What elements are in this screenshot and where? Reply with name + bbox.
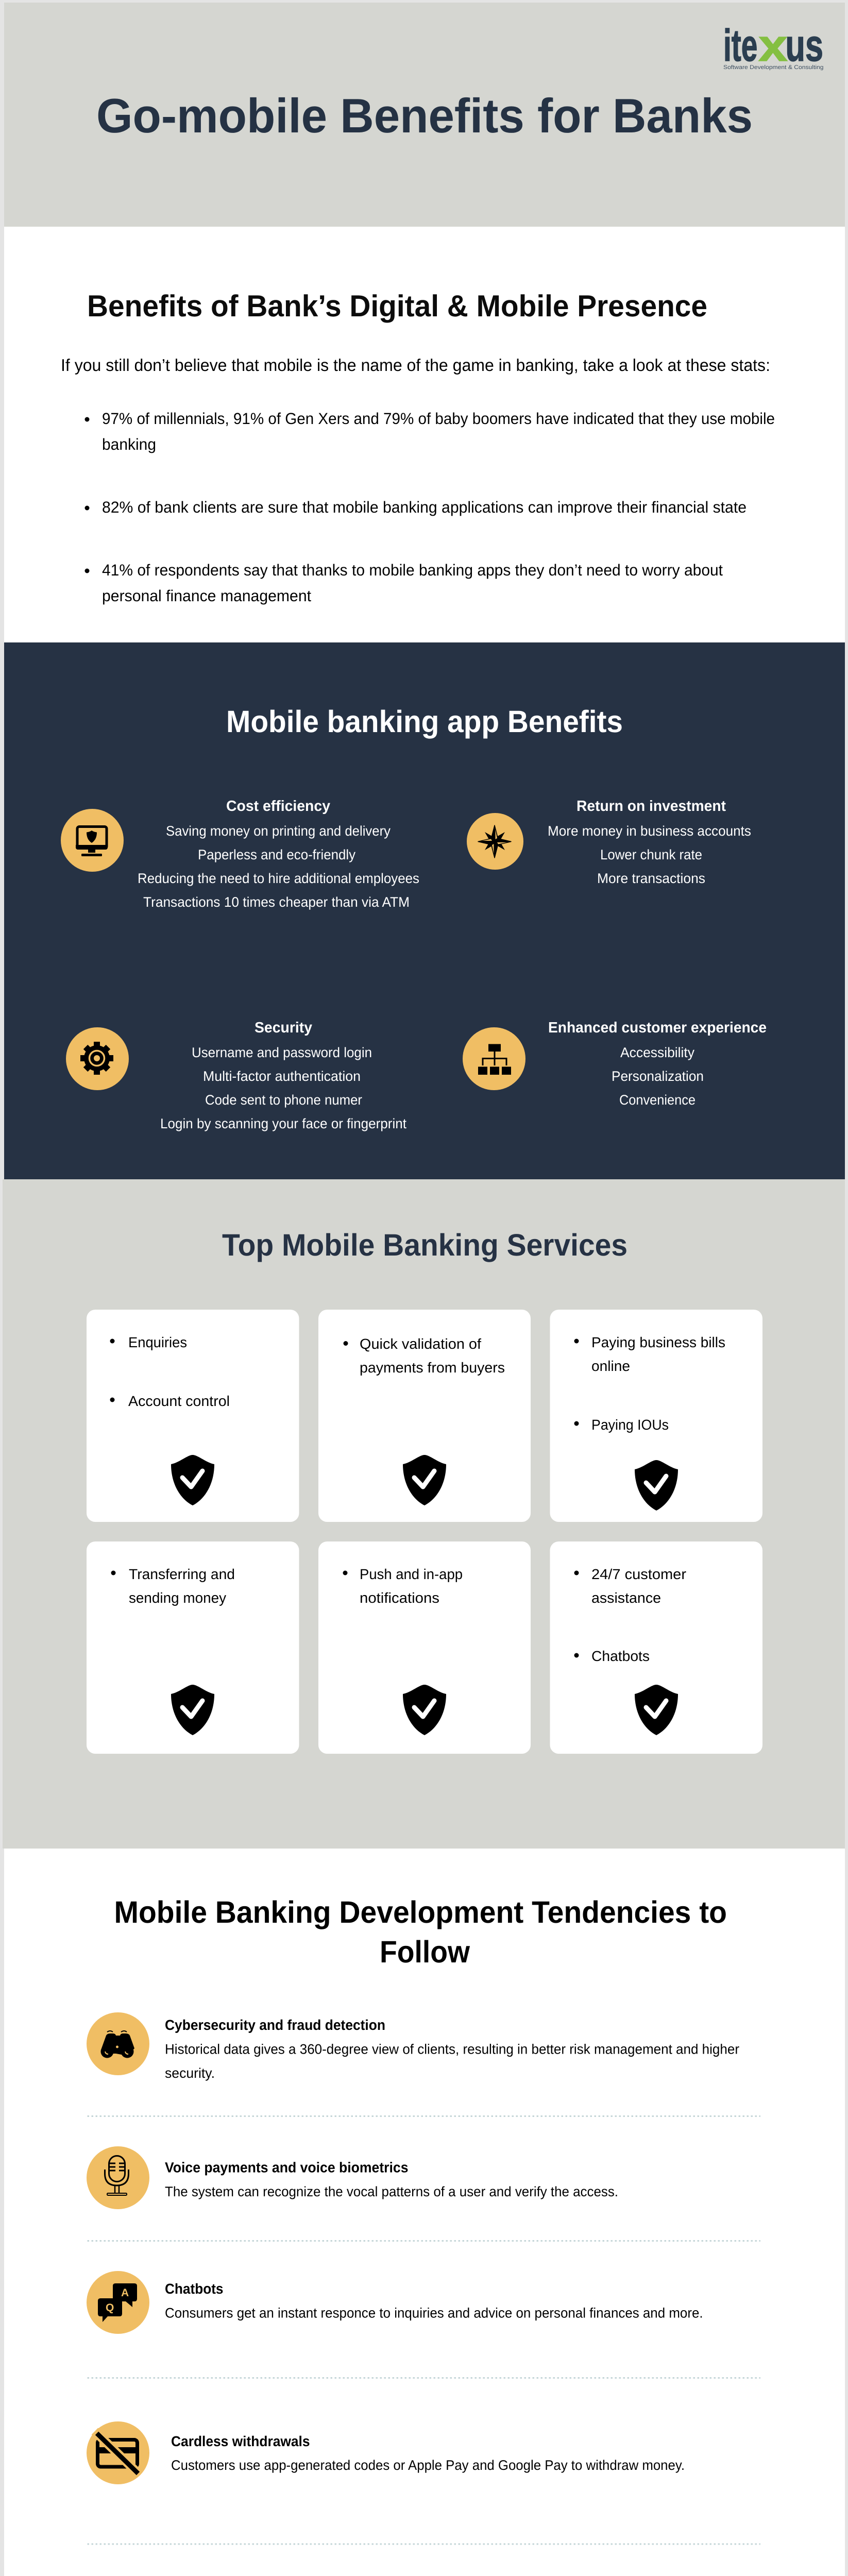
trend: cybersecurity: Historical data gives a 360-degree view of clients, resulting in better risk management and higher <box>165 2041 739 2057</box>
logo: header: us <box>786 20 823 71</box>
icon: monitor with shield <box>61 809 124 872</box>
heading: benefits of digital presence: Benefits of Bank’s Digital & Mobile Presence <box>87 289 707 323</box>
stat: financial state: 82% of bank clients are sure that mobile banking applications can improve their financial state <box>102 498 747 516</box>
card: notifications: Push and in-app <box>360 1566 463 1582</box>
icon: binoculars <box>87 2012 149 2075</box>
card: transferring money <box>87 1541 299 1754</box>
benefit: return on investment: More money in business accounts <box>548 823 751 839</box>
logo: header: ite <box>723 20 757 71</box>
benefit: cost efficiency: Cost efficiency <box>226 798 330 815</box>
benefit: security: Code sent to phone numer <box>205 1092 362 1108</box>
benefit: return on investment: Lower chunk rate <box>600 847 702 862</box>
panel: digital and mobile presence <box>4 227 845 642</box>
stat: usage by generation: 97% of millennials, 91% of Gen Xers and 79% of baby boomers have indicated that they use mobile <box>102 410 775 428</box>
icon: microphone <box>87 2146 149 2209</box>
card: enquiries and account control: Account control <box>128 1393 230 1409</box>
trend: voice payments: Voice payments and voice biometrics <box>165 2160 408 2176</box>
stat: finance management <box>84 561 723 605</box>
heading: app benefits: Mobile banking app Benefits <box>226 704 623 739</box>
heading: development tendencies <box>114 1895 727 1969</box>
icon: org chart <box>463 1027 525 1090</box>
intro text: If you still don’t believe that mobile is the name of the game in banking, take a look at these stats: <box>61 355 770 375</box>
trend: cybersecurity: Cybersecurity and fraud detection <box>165 2017 385 2033</box>
benefit: enhanced customer experience: Enhanced customer experience <box>548 1020 767 1036</box>
stat: usage by generation <box>84 410 775 453</box>
card: quick validation: payments from buyers <box>360 1360 505 1376</box>
trend: cybersecurity <box>165 2017 739 2081</box>
heading: development tendencies: Follow <box>380 1935 470 1969</box>
benefit: cost efficiency: Saving money on printing and delivery <box>166 823 391 839</box>
benefit: security: Username and password login <box>192 1045 372 1060</box>
trend: chatbots: Chatbots <box>165 2281 224 2297</box>
card: transferring money: sending money <box>129 1590 226 1606</box>
card: notifications <box>318 1541 531 1754</box>
trend: chatbots <box>165 2281 703 2321</box>
trend: cybersecurity: security. <box>165 2065 215 2081</box>
benefit: cost efficiency <box>138 798 419 910</box>
benefit: enhanced customer experience: Personalization <box>612 1069 704 1084</box>
card: quick validation: Quick validation of <box>360 1336 481 1352</box>
logo: header: Software Development & Consulting <box>723 64 823 71</box>
panel: mobile banking app benefits <box>4 642 845 1179</box>
title: Go-mobile Benefits for Banks <box>96 89 753 143</box>
card: transferring money: Transferring and <box>129 1566 235 1582</box>
benefit: security <box>160 1020 406 1131</box>
panel: development tendencies <box>4 1849 845 2576</box>
benefit: return on investment: More transactions <box>597 871 705 886</box>
card: paying bills: Paying IOUs <box>591 1417 669 1433</box>
panel: top mobile banking services <box>3 1179 845 1849</box>
trend: chatbots: Consumers get an instant responce to inquiries and advice on personal finances and more. <box>165 2306 703 2321</box>
card: customer assistance: 24/7 customer <box>591 1566 686 1582</box>
card: customer assistance: Chatbots <box>591 1648 650 1664</box>
icon: compass star <box>467 813 523 870</box>
benefit: cost efficiency: Reducing the need to hire additional employees <box>138 871 419 886</box>
benefit: security: Login by scanning your face or fingerprint <box>160 1116 406 1131</box>
benefit: enhanced customer experience: Convenience <box>619 1092 696 1108</box>
trend: voice payments: The system can recognize the vocal patterns of a user and verify the access. <box>165 2184 618 2199</box>
benefit: cost efficiency: Transactions 10 times cheaper than via ATM <box>143 894 410 910</box>
benefit: security: Multi-factor authentication <box>203 1069 361 1084</box>
heading: top services: Top Mobile Banking Services <box>222 1228 627 1262</box>
card: paying bills <box>550 1310 762 1522</box>
logo: header: x <box>758 20 788 71</box>
heading: development tendencies: Mobile Banking Development Tendencies to <box>114 1895 727 1929</box>
trend: cardless withdrawals: Customers use app-generated codes or Apple Pay and Google Pay to withdraw money. <box>171 2458 685 2473</box>
card: notifications: notifications <box>360 1590 439 1606</box>
benefit: security: Security <box>255 1020 312 1036</box>
icon: question and answer bubbles <box>87 2271 149 2334</box>
stat: finance management: 41% of respondents say that thanks to mobile banking apps they don’t need to worry about <box>102 561 723 579</box>
card: customer assistance <box>550 1541 762 1754</box>
card: paying bills: online <box>591 1358 630 1374</box>
panel: header <box>4 3 845 227</box>
card: enquiries and account control <box>87 1310 299 1522</box>
icon: question and answer bubbles: A <box>121 2287 129 2299</box>
icon: crossed out card <box>87 2421 149 2484</box>
benefit: cost efficiency: Paperless and eco-friendly <box>198 847 355 862</box>
benefit: enhanced customer experience <box>548 1020 767 1108</box>
trend: cardless withdrawals: Cardless withdrawals <box>171 2433 310 2449</box>
card: paying bills: Paying business bills <box>591 1334 725 1350</box>
logo: header <box>723 20 823 71</box>
stat: usage by generation: banking <box>102 435 156 453</box>
benefit: return on investment <box>548 798 751 886</box>
card: customer assistance: assistance <box>591 1590 661 1606</box>
card: quick validation <box>318 1310 531 1522</box>
icon: question and answer bubbles: Q <box>106 2302 114 2314</box>
trend: voice payments <box>165 2160 618 2199</box>
benefit: return on investment: Return on investment <box>576 798 726 815</box>
trend: cardless withdrawals <box>171 2433 685 2473</box>
benefit: enhanced customer experience: Accessibility <box>620 1045 694 1060</box>
icon: gear <box>66 1027 129 1090</box>
stat: finance management: personal finance management <box>102 587 311 605</box>
card: enquiries and account control: Enquiries <box>128 1334 187 1350</box>
